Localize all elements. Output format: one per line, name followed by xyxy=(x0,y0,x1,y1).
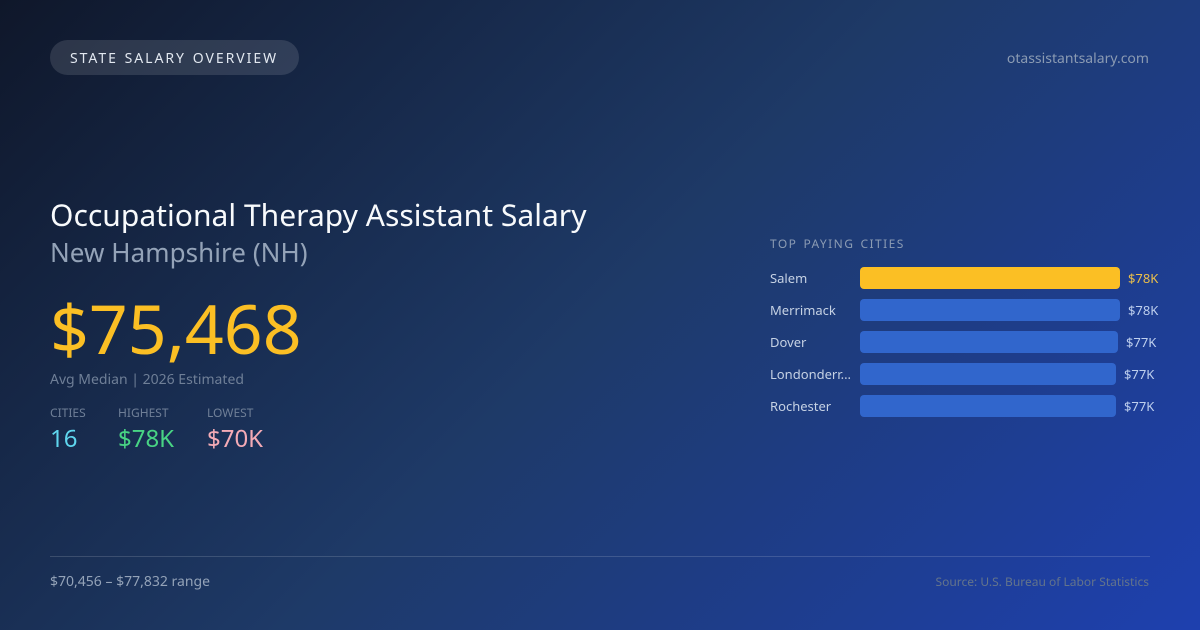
bar row: Dover: $77K xyxy=(1126,333,1156,351)
bar row: Londonderry xyxy=(770,363,1154,385)
bar row: Rochester: Rochester xyxy=(770,397,831,415)
stat: cities xyxy=(50,404,86,455)
badge: state salary overview xyxy=(50,40,299,75)
stat: cities: CITIES xyxy=(50,404,86,421)
bar row: Merrimack: $78K xyxy=(1128,301,1158,319)
stat: highest: $78K xyxy=(118,422,174,455)
stat: cities: 16 xyxy=(50,422,77,455)
salary caption: Avg Median | 2026 Estimated xyxy=(50,370,244,389)
bar row: Merrimack: Merrimack xyxy=(770,301,836,319)
salary range: $70,456 – $77,832 range xyxy=(50,572,210,591)
stat: lowest: LOWEST xyxy=(207,404,253,421)
stat: highest: HIGHEST xyxy=(118,404,169,421)
site domain: otassistantsalary.com xyxy=(1007,49,1149,68)
stat: highest xyxy=(118,404,174,455)
source note: Source: U.S. Bureau of Labor Statistics xyxy=(936,573,1149,590)
stat: lowest: $70K xyxy=(207,422,263,455)
bar row: Merrimack xyxy=(770,299,1158,321)
bar row: Salem: $78K xyxy=(1128,269,1158,287)
bar row: Dover xyxy=(770,331,1156,353)
bar row: Rochester xyxy=(770,395,1154,417)
badge: state salary overview: STATE SALARY OVERVIEW xyxy=(70,49,278,68)
bar row: Londonderry: $77K xyxy=(1124,365,1154,383)
bar row: Salem: Salem xyxy=(770,269,807,287)
bar row: Londonderry: Londonderr... xyxy=(770,365,851,383)
headline salary: $75,468 xyxy=(50,281,302,374)
panel heading: TOP PAYING CITIES xyxy=(770,235,905,252)
subtitle: state: New Hampshire (NH) xyxy=(50,234,308,270)
stat: lowest xyxy=(207,404,263,455)
bar row: Salem xyxy=(770,267,1158,289)
panel: top paying cities xyxy=(770,235,1158,417)
bar row: Rochester: $77K xyxy=(1124,397,1154,415)
bar row: Dover: Dover xyxy=(770,333,806,351)
title: Occupational Therapy Assistant Salary xyxy=(50,194,587,235)
